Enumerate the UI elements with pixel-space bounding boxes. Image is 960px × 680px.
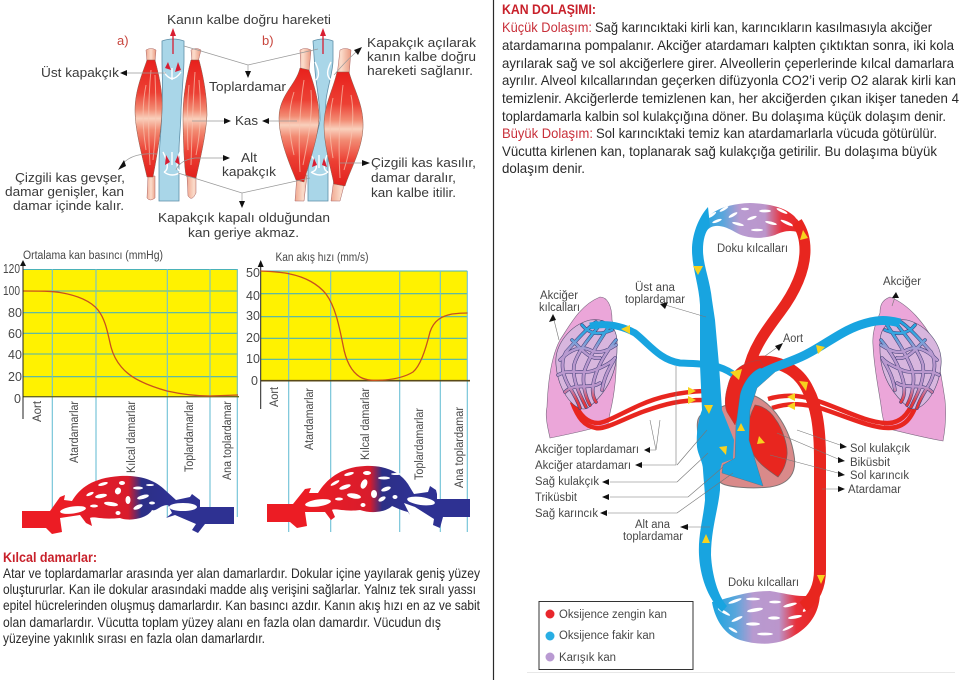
muscle b left <box>279 48 319 201</box>
panel divider line <box>492 0 494 680</box>
muscle b right <box>324 48 363 201</box>
diagram labels: Üst ana <box>635 282 676 294</box>
heading: Kılcal damarlar: <box>3 549 97 565</box>
lung right <box>873 297 946 441</box>
diagram arrowheads <box>549 292 899 530</box>
left ventricle <box>748 405 787 477</box>
segment labels: Ana toplardamar <box>222 401 234 480</box>
aorta lower arch <box>752 362 820 607</box>
diagram labels: Biküsbit <box>850 457 891 469</box>
muscle diagram labels: Üst kapakçık <box>41 65 119 80</box>
diagram labels: Akciğer atardamarı <box>535 460 631 472</box>
lung capillaries left <box>556 320 617 409</box>
axis labels: 60 <box>8 327 22 341</box>
pulmonary veins right <box>768 396 918 428</box>
pressure curve <box>24 291 238 396</box>
text block: kılcal damarlar: Atar ve toplardamarlar arasında yer alan damarlardır. Dokular içine yayılarak geniş yüzey <box>3 565 480 581</box>
diagram labels: toplardamar <box>623 531 683 543</box>
muscle diagram labels: kan kalbe itilir. <box>371 185 456 200</box>
text block: kılcal damarlar: yüzeyine yakınlık sırası en fazla olan damarlardır. <box>3 630 265 646</box>
axis labels: 20 <box>8 370 22 384</box>
chart: flow velocity <box>246 252 470 532</box>
axis labels: 0 <box>251 374 258 388</box>
segment labels: Atardamarlar <box>304 388 316 450</box>
muscle diagram labels: Toplardamar <box>209 79 287 94</box>
segment labels: Aort <box>32 400 44 422</box>
muscle diagram labels: Kapakçık açılarak <box>367 35 476 50</box>
axis labels: 100 <box>3 284 20 298</box>
diagram labels: Sol karıncık <box>850 470 909 482</box>
muscle vein a <box>159 28 184 201</box>
diagram labels: Triküsbit <box>535 492 578 504</box>
text block: kılcal damarlar: epitel hücrelerinden oluşmuş damarlardır. Kan basıncı azdır. Kanın akış hızı en az ve sabit <box>3 597 480 613</box>
text block: kılcal damarlar: oluştururlar. Kan ile dokular arasındaki madde alış verişini sağlarlar. Yalnız tek sıralı yassı <box>3 581 476 597</box>
muscle diagram labels: kan geriye akmaz. <box>188 225 299 240</box>
segment labels: Toplardamarlar <box>414 408 426 480</box>
axis labels <box>3 250 163 406</box>
diagram labels: toplardamar <box>625 294 685 306</box>
diagram labels: Sağ kulakçık <box>535 476 599 488</box>
axis labels: Ortalama kan basıncı (mmHg) <box>23 250 163 262</box>
axis labels: 120 <box>3 262 20 276</box>
text block: kan dolaşımı: Sol karıncıktaki temiz kan atardamarlarla vücuda götürülür. <box>596 125 937 141</box>
axis labels: 40 <box>8 348 22 362</box>
text block: kan dolaşımı <box>502 1 959 176</box>
diagram labels: Atardamar <box>848 484 901 496</box>
systemic vein and right atrium <box>692 207 734 612</box>
chart: blood pressure <box>3 250 239 534</box>
diagram labels: Alt ana <box>635 519 671 531</box>
axis labels: 10 <box>246 352 260 366</box>
muscle diagram labels: damar daralır, <box>371 170 456 185</box>
lung left <box>546 297 616 438</box>
text block: kan dolaşımı: dolaşım denir. <box>502 160 585 176</box>
muscle diagram labels: Çizgili kas kasılır, <box>371 155 476 170</box>
aorta up to tissue <box>748 222 805 372</box>
legend <box>539 602 693 670</box>
pulmonary veins left <box>572 391 704 428</box>
plot area <box>24 270 238 396</box>
capillary bed 1 <box>22 476 234 534</box>
muscle a left <box>135 48 162 200</box>
lung capillaries right <box>880 320 941 409</box>
muscle diagram arrowheads <box>118 47 370 208</box>
diagram labels: kılcalları <box>539 302 580 314</box>
axis labels: 0 <box>14 392 21 406</box>
panel: circulation diagram <box>535 203 946 644</box>
muscle diagram labels: Alt <box>241 150 257 165</box>
diagram labels: Sol kulakçık <box>850 443 910 455</box>
tissue capillaries top <box>700 203 805 238</box>
text block: kan dolaşımı: Vücutta kirlenen kan, toplanarak sağ kulakçığa getirilir. Bu dolaşıma büyük <box>502 143 938 159</box>
muscle diagram labels: Kapakçık kapalı olduğundan <box>158 210 330 225</box>
muscle a right <box>183 48 207 198</box>
pulmonary artery left branch <box>590 325 733 374</box>
axis labels: 50 <box>246 266 260 280</box>
pulmonary artery right branch <box>752 321 900 381</box>
axis labels: Kan akış hızı (mm/s) <box>276 252 369 264</box>
diagram labels <box>535 243 921 589</box>
axis labels: 30 <box>246 309 260 323</box>
diagram labels: Akciğer <box>883 276 921 288</box>
aortic root <box>725 360 765 425</box>
segment labels: Kılcal damarlar <box>360 388 372 460</box>
text block: kılcal damarlar <box>3 549 480 646</box>
heart wall <box>697 396 795 488</box>
legend: Oksijence fakir kan <box>559 630 655 642</box>
muscle diagram labels: kapakçık <box>222 164 276 179</box>
heading: KAN DOLAŞIMI: <box>502 1 596 17</box>
diagram labels: Aort <box>783 333 804 345</box>
muscle diagram labels: b) <box>262 33 274 48</box>
segment labels <box>32 400 234 480</box>
panel: muscle pump diagram <box>5 12 476 240</box>
segment labels: Kılcal damarlar <box>126 401 138 473</box>
text block: kılcal damarlar: olan damarlardır. Vücutta toplam yüzey alanı en fazla olan damardır. Vücudun dış <box>3 614 441 630</box>
muscle diagram labels: Kas <box>235 113 258 128</box>
axis labels: 80 <box>8 306 22 320</box>
flow arrows <box>621 230 825 584</box>
axis labels: 40 <box>246 289 260 303</box>
legend: Oksijence zengin kan <box>559 609 667 621</box>
capillary bed 2 <box>267 466 470 528</box>
plot area <box>261 271 467 381</box>
text block: kan dolaşımı: Sağ karıncıktaki kirli kan, karıncıkların kasılmasıyla akciğer <box>595 19 932 35</box>
muscle diagram leader lines <box>120 46 362 202</box>
segment labels <box>269 386 466 488</box>
muscle diagram labels: Kanın kalbe doğru hareketi <box>167 12 331 27</box>
segment labels: Ana toplardamar <box>454 407 466 488</box>
muscle vein b <box>308 28 333 201</box>
diagram labels: Doku kılcalları <box>728 577 799 589</box>
muscle diagram labels: a) <box>117 33 129 48</box>
velocity curve <box>261 271 468 380</box>
muscle diagram labels: damar içinde kalır. <box>13 198 124 213</box>
axis labels: 20 <box>246 331 260 345</box>
diagram labels: Sağ karıncık <box>535 508 598 520</box>
muscle diagram labels: kanın kalbe doğru <box>367 49 476 64</box>
muscle diagram labels: damar genişler, kan <box>5 184 124 199</box>
diagram labels: Akciğer toplardamarı <box>535 444 639 456</box>
diagram labels: Doku kılcalları <box>717 243 788 255</box>
text block: kan dolaşımı: Küçük Dolaşım: <box>502 19 592 35</box>
axis labels <box>246 252 369 388</box>
legend: Karışık kan <box>559 652 616 664</box>
diagram leader lines <box>553 294 896 527</box>
muscle diagram labels <box>5 12 476 240</box>
segment labels: Atardamarlar <box>69 401 81 463</box>
segment labels: Aort <box>269 386 281 407</box>
right ventricle and pulmonary trunk <box>722 368 775 486</box>
text block: kan dolaşımı: Büyük Dolaşım: <box>502 125 593 141</box>
segment labels: Toplardamarlar <box>184 401 196 472</box>
muscle diagram labels: Çizgili kas gevşer, <box>15 170 125 185</box>
diagram labels: Akciğer <box>540 290 578 302</box>
tissue capillaries bottom <box>712 591 820 644</box>
muscle diagram labels: hareketi sağlanır. <box>367 63 473 78</box>
